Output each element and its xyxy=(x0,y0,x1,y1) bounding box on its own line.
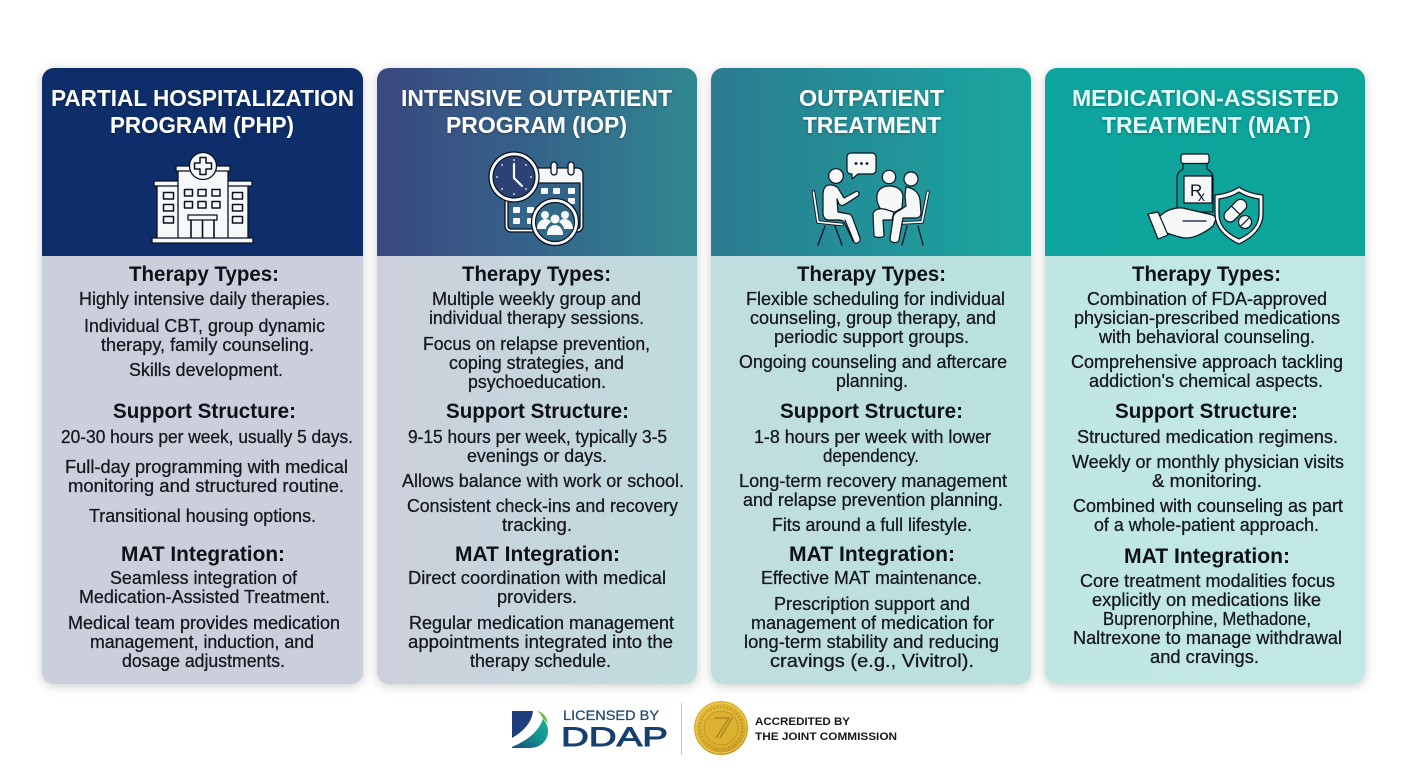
outpatient therapy types: Ongoing counseling and aftercare xyxy=(739,352,1007,372)
panel: intensive outpatient program xyxy=(377,68,697,684)
panel: partial hospitalization program xyxy=(42,68,363,684)
IOP support structure: tracking. xyxy=(502,515,572,535)
outpatient support structure xyxy=(739,400,1007,535)
IOP therapy types: Therapy Types: xyxy=(462,263,611,286)
MAT integration: and cravings. xyxy=(1150,647,1259,667)
outpatient therapy types: counseling, group therapy, and xyxy=(750,308,996,328)
IOP MAT integration: therapy schedule. xyxy=(470,651,611,671)
outpatient MAT integration: cravings (e.g., Vivitrol). xyxy=(770,651,974,671)
PHP support structure: Full-day programming with medical xyxy=(65,457,348,477)
IOP support structure: 9-15 hours per week, typically 3-5 xyxy=(408,427,667,447)
licensed by DDAP wordmark: LICENSED BY xyxy=(563,708,659,723)
panel: medication-assisted treatment xyxy=(1045,68,1365,684)
PHP MAT integration: dosage adjustments. xyxy=(122,651,285,671)
MAT support structure: of a whole-patient approach. xyxy=(1094,515,1319,535)
PHP MAT integration: Medication-Assisted Treatment. xyxy=(79,587,330,607)
MAT therapy types: Comprehensive approach tackling xyxy=(1071,352,1343,372)
MAT integration xyxy=(1073,545,1342,667)
icon: hospital xyxy=(152,152,253,243)
PHP MAT integration xyxy=(68,543,340,671)
PHP MAT integration: MAT Integration: xyxy=(121,543,285,566)
outpatient MAT integration xyxy=(744,543,999,671)
IOP therapy types: Focus on relapse prevention, xyxy=(423,334,650,354)
IOP therapy types: individual therapy sessions. xyxy=(429,308,644,328)
IOP MAT integration: MAT Integration: xyxy=(455,543,620,566)
IOP title xyxy=(401,85,673,138)
outpatient therapy types: Therapy Types: xyxy=(797,263,946,286)
MAT support structure xyxy=(1072,400,1344,535)
outpatient title: TREATMENT xyxy=(803,112,942,138)
PHP therapy types: Individual CBT, group dynamic xyxy=(84,316,325,336)
IOP therapy types: coping strategies, and xyxy=(449,353,624,373)
IOP therapy types: psychoeducation. xyxy=(468,372,606,392)
PHP support structure: 20-30 hours per week, usually 5 days. xyxy=(61,427,353,447)
MAT title: MEDICATION-ASSISTED xyxy=(1072,85,1339,111)
footer: accreditation logos xyxy=(512,701,897,755)
MAT support structure: Weekly or monthly physician visits xyxy=(1072,452,1344,472)
IOP support structure: Support Structure: xyxy=(446,400,629,423)
MAT support structure: Structured medication regimens. xyxy=(1077,427,1338,447)
IOP MAT integration: Direct coordination with medical xyxy=(408,568,666,588)
outpatient MAT integration: Effective MAT maintenance. xyxy=(761,568,982,588)
outpatient MAT integration: MAT Integration: xyxy=(789,543,955,566)
icon: Joint Commission gold seal xyxy=(694,701,748,755)
outpatient therapy types: periodic support groups. xyxy=(774,327,969,347)
licensed by DDAP wordmark: DDAP xyxy=(561,722,668,752)
PHP MAT integration: Medical team provides medication xyxy=(68,613,340,633)
PHP therapy types xyxy=(79,263,330,380)
licensed by DDAP wordmark xyxy=(561,708,668,752)
IOP title: INTENSIVE OUTPATIENT xyxy=(401,85,673,111)
outpatient therapy types xyxy=(739,263,1007,391)
PHP support structure: Transitional housing options. xyxy=(89,506,316,526)
MAT support structure: & monitoring. xyxy=(1152,471,1262,491)
outpatient support structure: dependency. xyxy=(823,446,919,466)
MAT integration: Core treatment modalities focus xyxy=(1080,571,1335,591)
MAT integration: MAT Integration: xyxy=(1124,545,1290,568)
IOP support structure: Consistent check-ins and recovery xyxy=(407,496,678,516)
outpatient MAT integration: management of medication for xyxy=(751,613,994,633)
MAT therapy types: Therapy Types: xyxy=(1132,263,1281,286)
MAT therapy types xyxy=(1071,263,1343,391)
MAT therapy types: with behavioral counseling. xyxy=(1098,327,1315,347)
IOP MAT integration: Regular medication management xyxy=(409,613,674,633)
PHP therapy types: Highly intensive daily therapies. xyxy=(79,289,330,309)
icon: counseling group xyxy=(814,153,928,245)
IOP title: PROGRAM (IOP) xyxy=(446,112,627,138)
outpatient support structure: Support Structure: xyxy=(780,400,963,423)
MAT support structure: Support Structure: xyxy=(1115,400,1298,423)
IOP support structure xyxy=(402,400,684,535)
icon: DDAP mark xyxy=(512,711,548,748)
IOP therapy types: Multiple weekly group and xyxy=(432,289,641,309)
PHP therapy types: Skills development. xyxy=(129,360,283,380)
card 4 background xyxy=(1045,68,1365,684)
PHP title xyxy=(51,85,354,138)
MAT title: TREATMENT (MAT) xyxy=(1102,112,1311,138)
PHP title: PROGRAM (PHP) xyxy=(110,112,294,138)
IOP therapy types xyxy=(423,263,650,392)
MAT support structure: Combined with counseling as part xyxy=(1073,496,1343,516)
outpatient MAT integration: long-term stability and reducing xyxy=(744,632,999,652)
card 3 background xyxy=(711,68,1031,684)
PHP MAT integration: management, induction, and xyxy=(90,632,314,652)
outpatient support structure: and relapse prevention planning. xyxy=(743,490,1003,510)
accredited by the joint commission text: ACCREDITED BY xyxy=(755,716,851,728)
PHP therapy types: therapy, family counseling. xyxy=(101,335,314,355)
outpatient therapy types: Flexible scheduling for individual xyxy=(746,289,1005,309)
MAT therapy types: physician-prescribed medications xyxy=(1074,308,1340,328)
PHP support structure: Support Structure: xyxy=(113,400,296,423)
outpatient support structure: Long-term recovery management xyxy=(739,471,1007,491)
PHP support structure: monitoring and structured routine. xyxy=(68,476,344,496)
outpatient title: OUTPATIENT xyxy=(799,85,945,111)
outpatient therapy types: planning. xyxy=(836,371,908,391)
IOP MAT integration xyxy=(408,543,674,671)
divider xyxy=(681,703,682,755)
MAT integration: Naltrexone to manage withdrawal xyxy=(1073,628,1342,648)
IOP MAT integration: providers. xyxy=(497,587,577,607)
outpatient support structure: Fits around a full lifestyle. xyxy=(772,515,972,535)
IOP support structure: Allows balance with work or school. xyxy=(402,471,684,491)
PHP MAT integration: Seamless integration of xyxy=(110,568,298,588)
PHP support structure xyxy=(61,400,353,526)
MAT therapy types: Combination of FDA-approved xyxy=(1087,289,1327,309)
MAT title xyxy=(1072,85,1339,138)
icon: hand, prescription bottle and shield: R xyxy=(1190,181,1202,200)
accredited by the joint commission text xyxy=(755,716,897,743)
IOP MAT integration: appointments integrated into the xyxy=(408,632,673,652)
MAT therapy types: addiction's chemical aspects. xyxy=(1089,371,1323,391)
card 2 background xyxy=(377,68,697,684)
icon: clock, calendar and group xyxy=(489,152,583,246)
outpatient support structure: 1-8 hours per week with lower xyxy=(754,427,991,447)
icon: hand, prescription bottle and shield xyxy=(1148,154,1263,244)
PHP therapy types: Therapy Types: xyxy=(129,263,279,286)
card 1 background xyxy=(42,68,363,684)
accredited by the joint commission text: THE JOINT COMMISSION xyxy=(755,731,897,743)
MAT integration: explicitly on medications like xyxy=(1092,590,1321,610)
panel: outpatient treatment xyxy=(711,68,1031,684)
outpatient title xyxy=(799,85,945,138)
IOP support structure: evenings or days. xyxy=(467,446,607,466)
icon: hand, prescription bottle and shield: x xyxy=(1198,188,1205,204)
PHP title: PARTIAL HOSPITALIZATION xyxy=(51,85,354,111)
outpatient MAT integration: Prescription support and xyxy=(774,594,970,614)
MAT integration: Buprenorphine, Methadone, xyxy=(1103,609,1311,629)
